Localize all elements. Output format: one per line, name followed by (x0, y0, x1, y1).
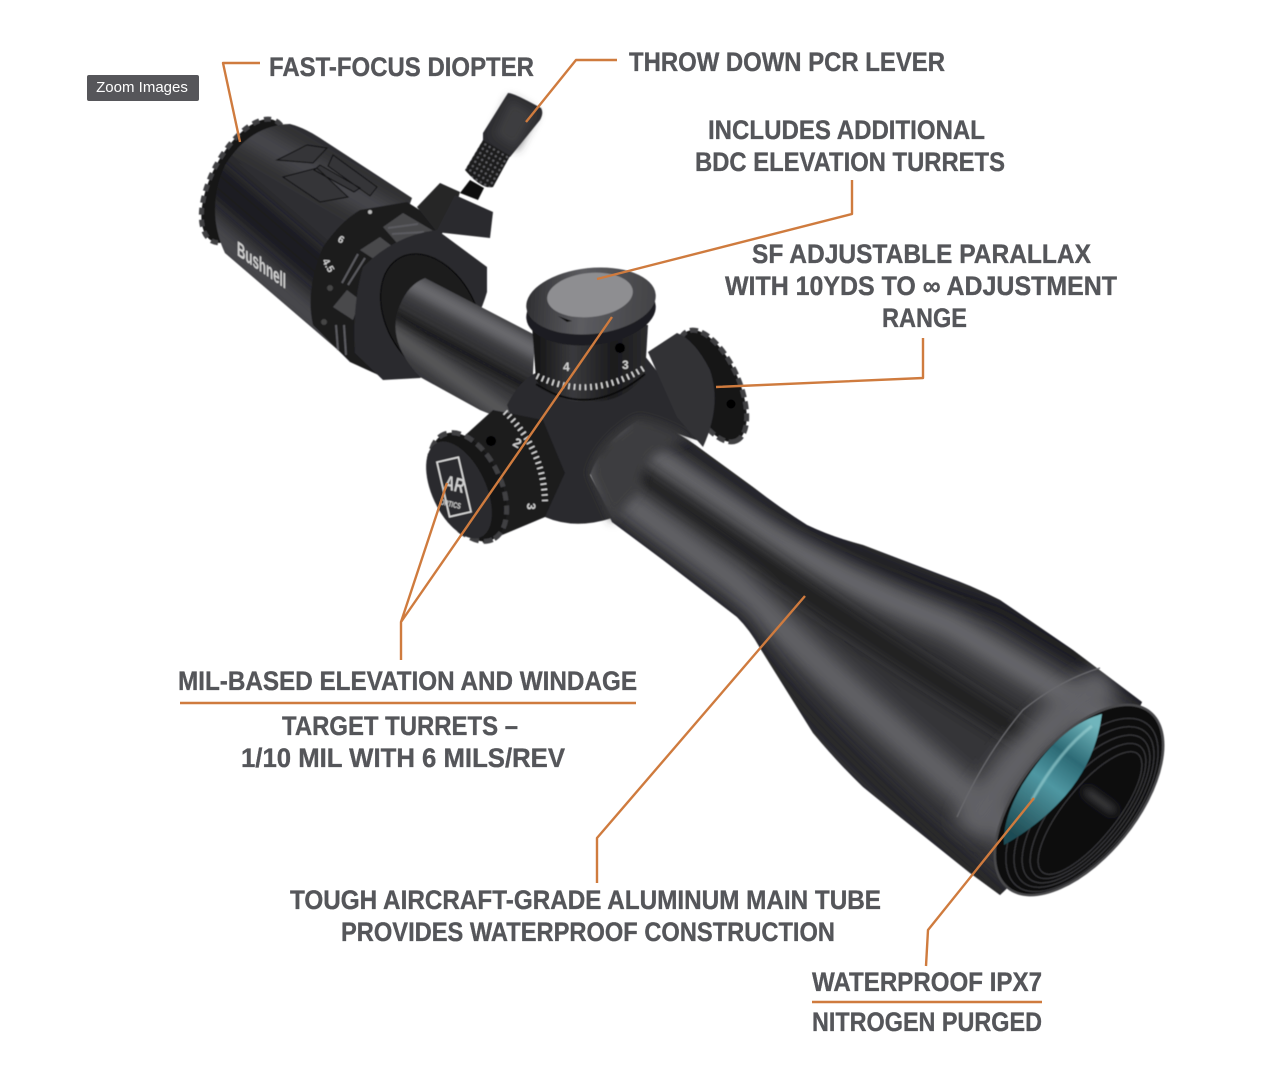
elevation turret: 4 (563, 360, 570, 374)
elevation turret: 3 (622, 358, 629, 372)
throw-down PCR lever (417, 93, 542, 238)
leader: waterproof (926, 798, 1034, 966)
label: BDC elevation turrets (695, 115, 1005, 177)
label: main tube (290, 885, 881, 947)
power ring ribbed tabs (333, 213, 437, 355)
front tube joint shading (590, 418, 690, 522)
ocular housing (214, 123, 413, 351)
AR Optics logo (437, 457, 471, 517)
label: target turrets (241, 711, 565, 773)
label: parallax: WITH 10YDS TO ∞ ADJUSTMENT (725, 271, 1117, 301)
central saddle (507, 350, 702, 524)
elevation turret cap (523, 272, 659, 352)
label: parallax: SF ADJUSTABLE PARALLAX (752, 239, 1091, 269)
label: fast-focus diopter: FAST-FOCUS DIOPTER (269, 52, 534, 82)
zoom images tooltip (87, 75, 199, 101)
riflescope illustration (170, 93, 1200, 930)
leaders: target turrets (401, 317, 612, 660)
label: target turrets: TARGET TURRETS – (282, 711, 518, 741)
label: target turrets: 1/10 MIL WITH 6 MILS/REV (241, 743, 565, 773)
callout lines (180, 60, 1042, 1002)
label: mil-based elevation and windage: MIL-BASED ELEVATION AND WINDAGE (178, 666, 637, 696)
leader: parallax (716, 338, 923, 387)
label: nitrogen purged: NITROGEN PURGED (812, 1007, 1042, 1037)
leader: BDC elevation turrets (597, 180, 852, 279)
magnification power ring (311, 202, 445, 378)
label: BDC elevation turrets: INCLUDES ADDITIONAL (708, 115, 985, 145)
fast-focus diopter ring (184, 106, 304, 256)
label: parallax: RANGE (882, 303, 967, 333)
magnification power ring: 4.5 (319, 257, 336, 275)
objective lens assembly (994, 704, 1166, 898)
label: BDC elevation turrets: BDC ELEVATION TURRETS (695, 147, 1005, 177)
brand name: Bushnell (237, 236, 286, 294)
lens barrel threads (1004, 717, 1160, 893)
label: throw down PCR lever: THROW DOWN PCR LEVER (629, 47, 945, 77)
leader: throw down PCR lever (526, 60, 617, 122)
windage turret: 3 (524, 503, 538, 510)
parallax side turret (648, 320, 761, 452)
leader: fast-focus diopter (223, 63, 260, 142)
lens glass (1004, 714, 1102, 845)
underline: waterproof (812, 1001, 1042, 1003)
windage turret: 2 (510, 435, 524, 451)
ocular engraved shapes (277, 145, 377, 202)
infographic canvas (87, 52, 1166, 1032)
label: parallax (725, 239, 1117, 333)
leader: main tube (597, 596, 805, 883)
label: main tube: PROVIDES WATERPROOF CONSTRUCTION (341, 917, 835, 947)
AR Optics logo: OPTICS (439, 497, 462, 511)
PCR collar (354, 230, 502, 395)
front main tube and objective bell (590, 420, 1143, 896)
zoom images tooltip: Zoom Images (96, 79, 188, 96)
rear main tube (395, 278, 535, 414)
label: waterproof IPX7: WATERPROOF IPX7 (812, 967, 1042, 997)
AR Optics logo: AR (442, 472, 467, 498)
label: main tube: TOUGH AIRCRAFT-GRADE ALUMINUM MAIN TUBE (290, 885, 881, 915)
underline: target turrets (180, 702, 636, 704)
elevation turret (523, 261, 659, 402)
barrel highlight (1085, 790, 1115, 812)
magnification power ring: 6 (336, 234, 346, 247)
windage turret (413, 410, 565, 554)
